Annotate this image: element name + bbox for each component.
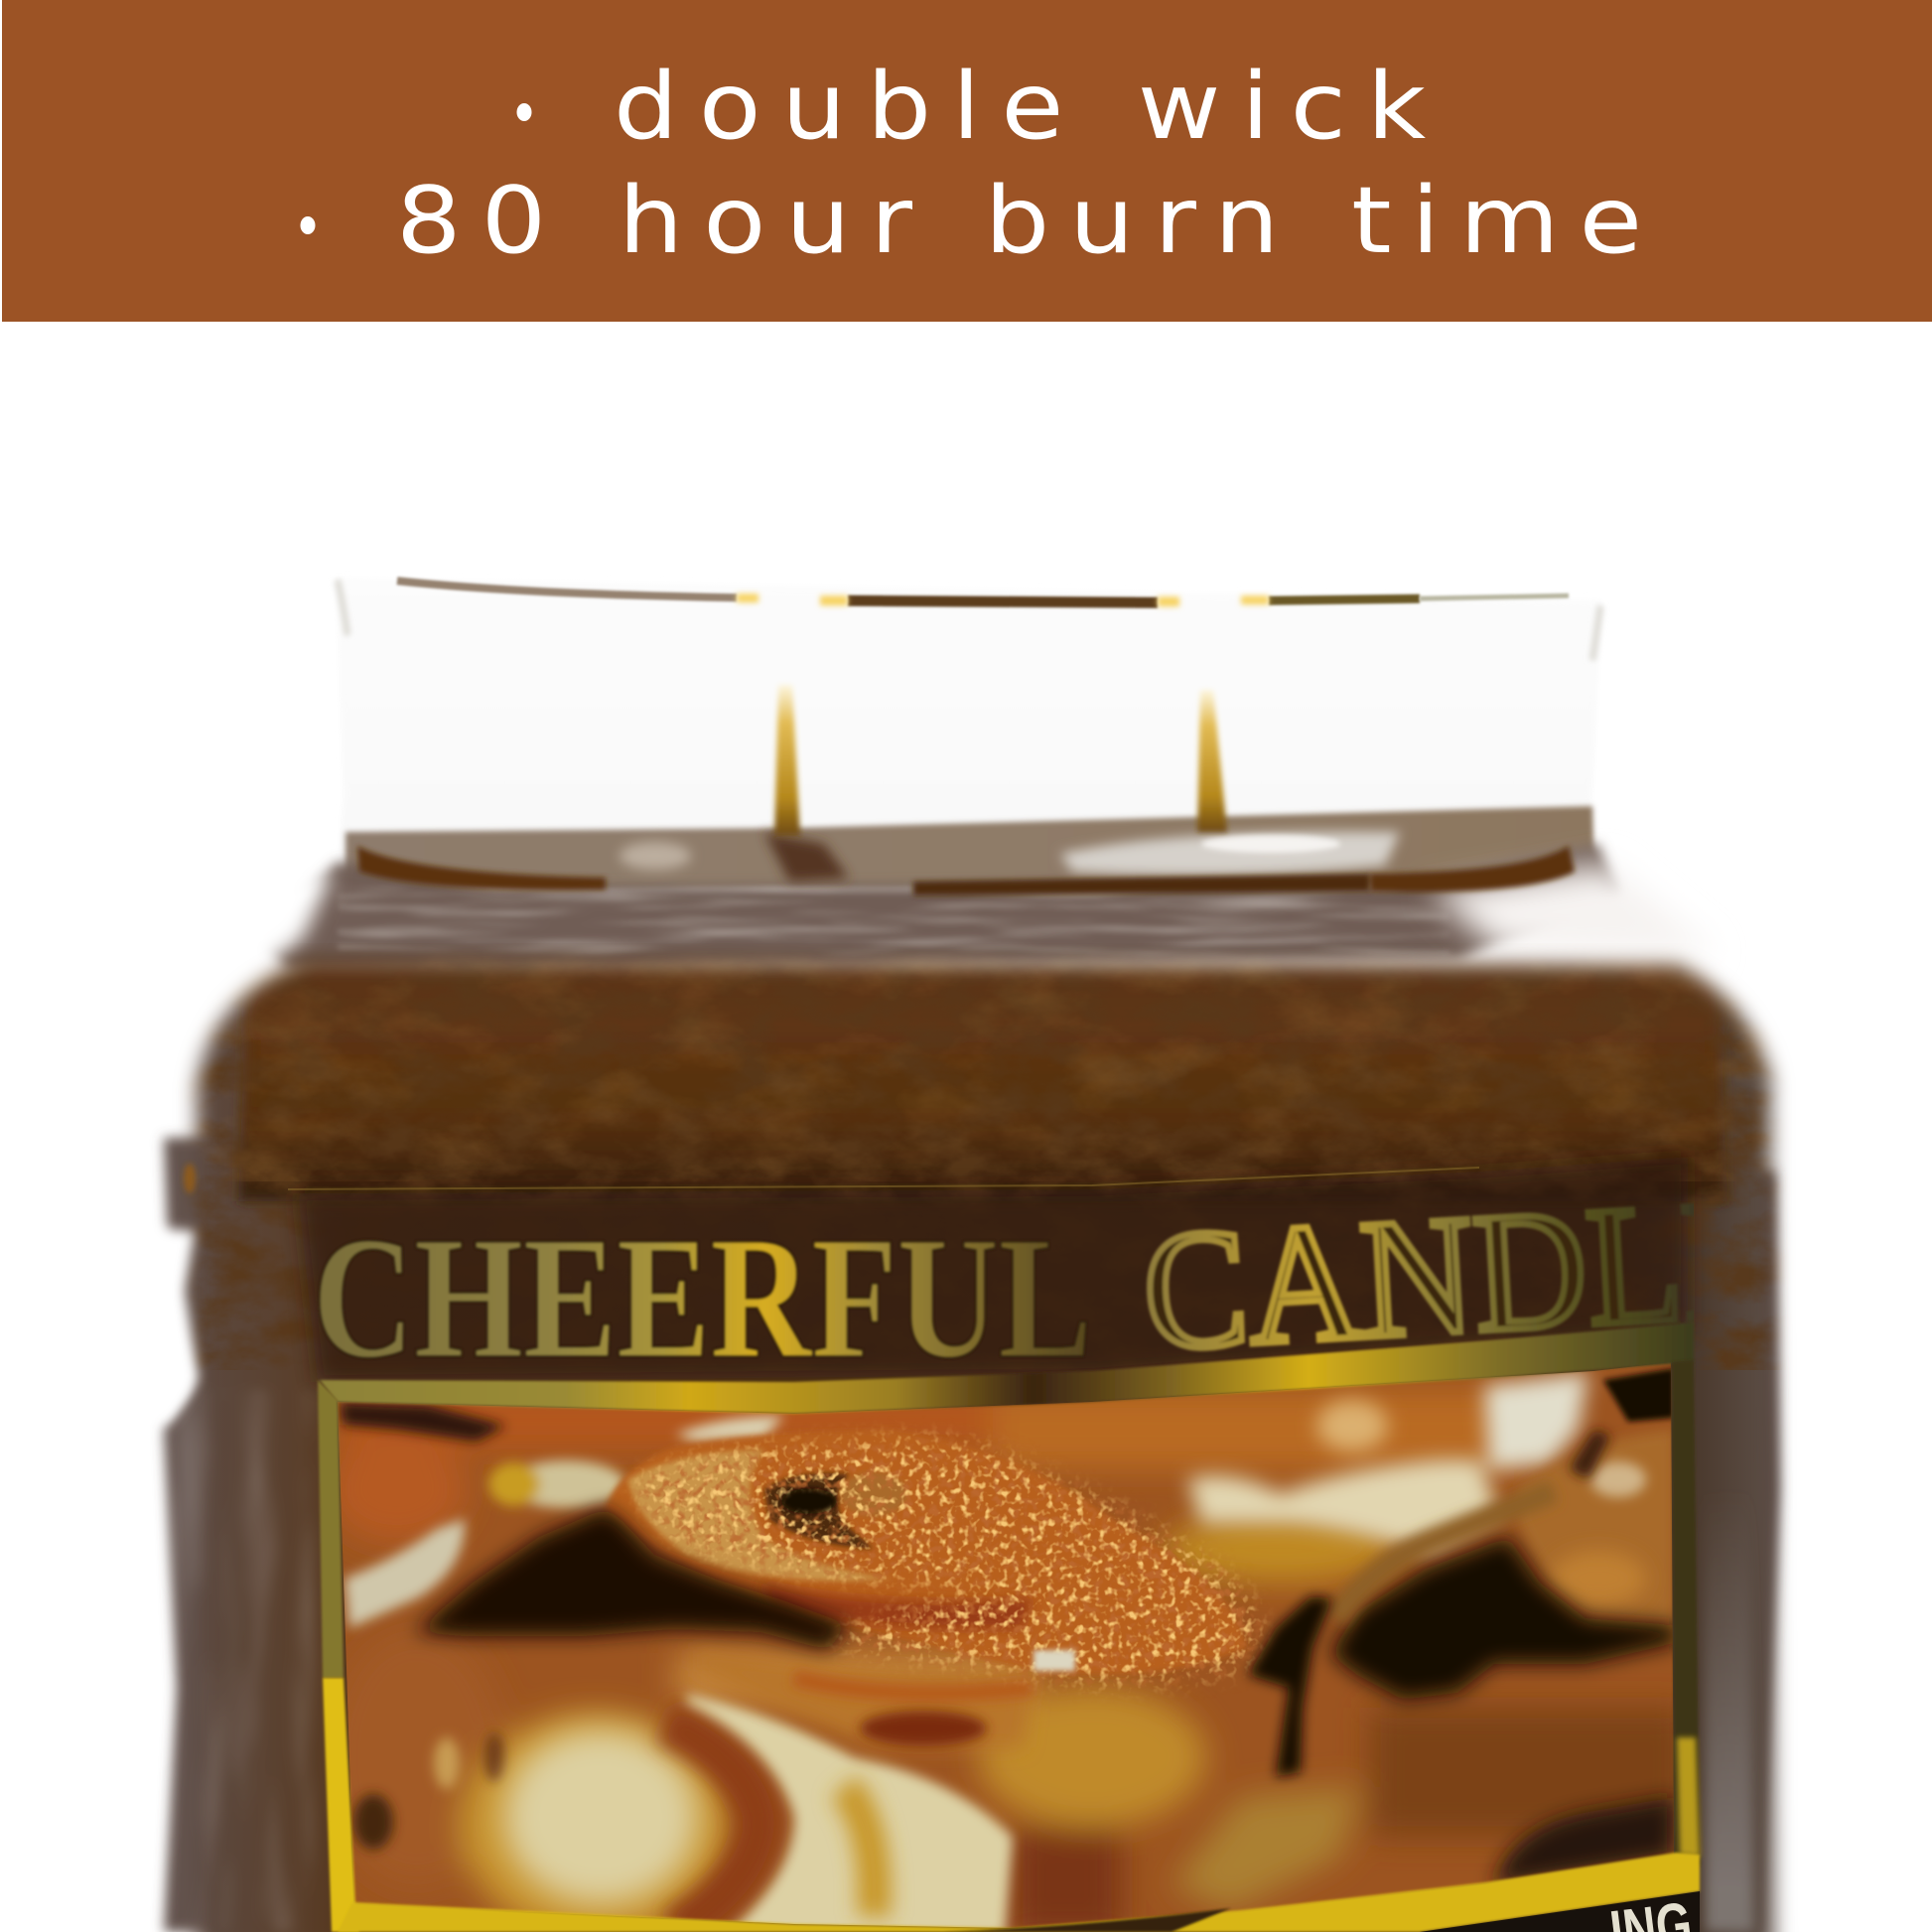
right frame [1672,1360,1700,1866]
bullet: burn time [300,216,316,234]
banner: product features [2,0,1932,322]
left rim brown [357,846,606,891]
brand name: CANDLE [1139,1164,1783,1387]
right rim brown [1370,846,1575,893]
pale wisps [345,1416,784,1628]
caramel band under roll [704,1663,1027,1754]
bullet: double wick [516,103,532,121]
top gold band [320,1322,1694,1414]
left frame olive [318,1380,344,1678]
roll pale crust [627,1449,894,1581]
white fade left of neck [169,874,333,1023]
right dark shadow [1330,1537,1676,1700]
right side haze [1678,1172,1779,1932]
brand name: CHEERFUL [313,1201,1092,1395]
glass rim and neck [336,578,1602,874]
background tones [328,1390,1688,1932]
lower right shadow [1494,1797,1674,1886]
crust edge [1335,1491,1554,1618]
highlights top right [1187,1372,1588,1554]
roll [604,1426,1269,1694]
white patches left [139,1226,199,1420]
dark name plate [1420,1891,1700,1932]
feature text: double wick: double wick [614,53,1447,160]
white fade right of neck [1430,864,1718,955]
candle jar [139,578,1817,1932]
wick left [774,685,800,836]
caramel arc [665,1723,759,1931]
sugar grains [635,1426,1269,1694]
label gold frame [318,1322,1700,1932]
center rim brown [913,874,1370,896]
grey streaks on sides [171,1390,315,1932]
left frame yellow [323,1678,359,1932]
top left shadow strip [340,1402,506,1442]
label photo: cinnamon roll [318,1350,1688,1932]
jar body and wax [139,943,1817,1932]
bottom gold band [338,1853,1700,1932]
yellow ribbon stripe [844,1787,875,1916]
rim highlight lines [397,581,1569,607]
amber spot [184,1164,196,1193]
right bottom grey edge [1704,1489,1753,1932]
side haze behind jar [164,1138,328,1932]
roll under shadow [760,1583,1033,1629]
right roll [1248,1368,1676,1777]
wick right [1197,690,1227,832]
roll center [764,1473,874,1549]
label band [288,1157,1783,1395]
cream ribbon [687,1694,1013,1932]
dark fold [1248,1596,1332,1777]
wax reflection and rim [357,832,1575,896]
wax surface inside jar [345,806,1594,890]
lower left swirl [353,1694,1013,1932]
bottom dark seam [943,1908,1231,1932]
feature text: burn time: 80 hour burn time [396,167,1662,274]
white sugar highlight [1034,1650,1075,1671]
dark crescent under roll [415,1508,850,1650]
brand name [319,1203,1694,1358]
glass neck band [169,844,1718,1023]
